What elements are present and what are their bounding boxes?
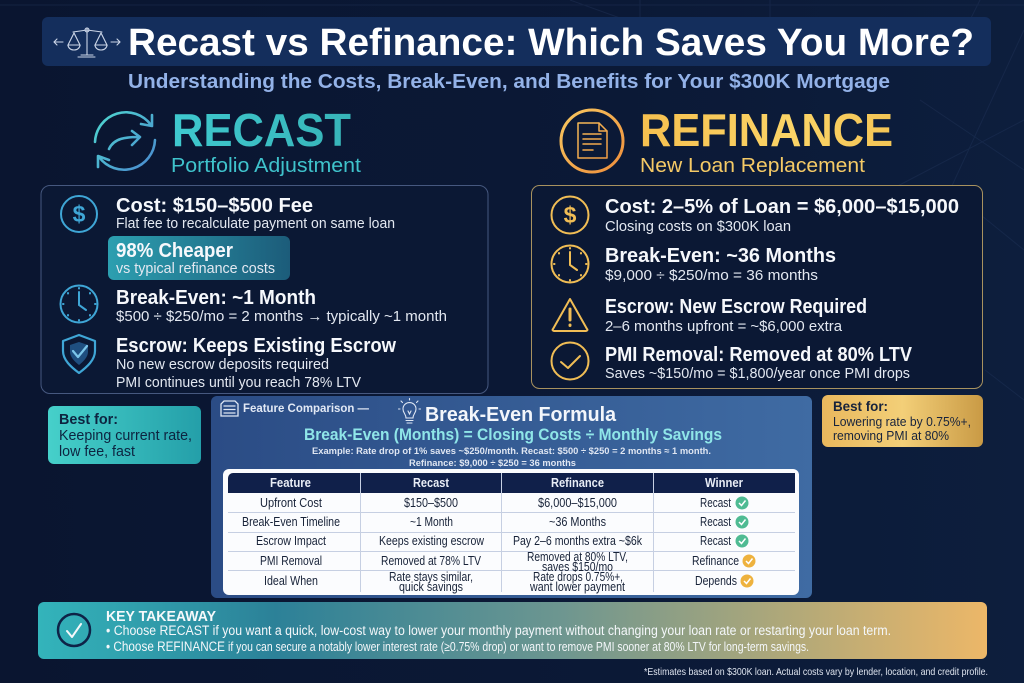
recast escrow: PMI continues until you reach 78% LTV <box>116 375 361 391</box>
icon: light bulb <box>398 398 420 423</box>
takeaway refinance line: • Choose REFINANCE <box>106 639 225 654</box>
formula heading: Break-Even Formula <box>425 404 617 426</box>
row: PMI removal: Removed at 80% LTV, <box>527 550 628 564</box>
callout: refinance best for: removing PMI at 80% <box>833 428 949 443</box>
icon: takeaway check <box>58 614 90 646</box>
icon: balance scales <box>54 28 120 57</box>
row: ideal when: quick savings <box>399 580 463 594</box>
refinance break-even: $9,000 ÷ $250/mo = 36 months <box>605 268 818 284</box>
row: break-even timeline: Break-Even Timeline <box>242 515 340 529</box>
recast cost: Cost: $150–$500 Fee <box>116 195 313 217</box>
recast break-even: Break-Even: ~1 Month <box>116 287 316 309</box>
callout: recast best for: Keeping current rate, <box>59 427 192 444</box>
row: ideal when <box>264 570 754 594</box>
recast header <box>95 104 361 177</box>
takeaway heading: KEY TAKEAWAY <box>106 608 216 625</box>
row: break-even timeline <box>242 515 748 529</box>
refinance cost: Cost: 2–5% of Loan = $6,000–$15,000 <box>605 196 959 218</box>
row: PMI removal: PMI Removal <box>260 554 322 568</box>
title banner <box>42 17 991 66</box>
icon: refinance clock <box>552 246 588 282</box>
row: escrow impact: Keeps existing escrow <box>379 534 485 548</box>
formula example <box>312 446 711 469</box>
icon: recast clock <box>60 286 98 322</box>
subtitle: Understanding the Costs, Break-Even, and Benefits for Your $300K Mortgage <box>128 71 890 93</box>
icon: document list <box>221 401 238 416</box>
icon: recast dollar: $ <box>73 201 86 227</box>
icon: recast arrows <box>95 112 155 170</box>
refinance break-even: Break-Even: ~36 Months <box>605 245 836 267</box>
callout: 98% cheaper <box>108 236 290 280</box>
icon: refinance check <box>552 342 588 380</box>
recast heading: RECAST <box>172 104 351 156</box>
table header: Winner <box>705 476 743 490</box>
recast escrow: No new escrow deposits required <box>116 357 329 373</box>
feature comparison label: Feature Comparison — <box>243 401 369 415</box>
callout: recast best for <box>48 406 201 464</box>
comparison table <box>223 469 799 595</box>
row: ideal when: Ideal When <box>264 574 318 588</box>
callout: 98% cheaper: vs typical refinance costs <box>116 261 275 277</box>
panel: refinance details <box>532 186 982 388</box>
row: PMI removal: Refinance <box>692 554 739 568</box>
row: PMI removal <box>260 550 756 574</box>
refinance escrow: Escrow: New Escrow Required <box>605 296 867 318</box>
refinance PMI <box>605 344 913 382</box>
recast subheading: Portfolio Adjustment <box>171 155 361 177</box>
icon: refinance dollar <box>552 196 588 234</box>
row: escrow impact <box>256 534 748 548</box>
row: PMI removal: saves $150/mo <box>542 560 613 574</box>
panel: feature comparison and formula <box>211 396 812 598</box>
icon: shield <box>63 335 95 373</box>
callout: refinance best for: Best for: <box>833 399 888 414</box>
row: ideal when: Rate drops 0.75%+, <box>533 570 623 584</box>
recast break-even: $500 ÷ $250/mo = 2 months → typically ~1 month <box>116 308 447 325</box>
refinance cost <box>605 196 959 235</box>
refinance escrow: 2–6 months upfront = ~$6,000 extra <box>605 319 843 335</box>
takeaway refinance line <box>106 639 809 654</box>
table header <box>270 476 743 490</box>
recast cost <box>116 195 395 232</box>
icon: refinance document <box>561 110 623 172</box>
refinance escrow <box>605 296 867 335</box>
callout: 98% cheaper: 98% Cheaper <box>116 240 233 262</box>
recast break-even <box>116 287 447 325</box>
refinance cost: Closing costs on $300K loan <box>605 219 791 235</box>
refinance PMI: Saves ~$150/mo = $1,800/year once PMI drops <box>605 366 910 382</box>
formula example: Refinance: $9,000 ÷ $250 = 36 months <box>409 458 576 469</box>
row: break-even timeline: ~1 Month <box>410 515 453 529</box>
table header: Refinance <box>551 476 604 490</box>
refinance header <box>561 104 893 177</box>
recast cost: Flat fee to recalculate payment on same loan <box>116 216 395 232</box>
row: escrow impact: Recast <box>700 534 731 548</box>
callout: recast best for: Best for: <box>59 412 118 428</box>
icon: refinance dollar: $ <box>564 202 577 228</box>
icon: warning triangle <box>553 299 587 331</box>
callout: refinance best for <box>822 395 983 447</box>
refinance PMI: PMI Removal: Removed at 80% LTV <box>605 344 913 366</box>
row: ideal when: Depends <box>695 574 737 588</box>
panel: key takeaway <box>38 602 987 659</box>
refinance break-even <box>605 245 836 284</box>
row: upfront cost: Upfront Cost <box>260 496 322 510</box>
formula: Break-Even (Months) = Closing Costs ÷ Monthly Savings <box>304 425 722 444</box>
row: escrow impact: Escrow Impact <box>256 534 326 548</box>
row: upfront cost: $150–$500 <box>404 496 458 510</box>
callout: refinance best for: Lowering rate by 0.75%+, <box>833 414 971 429</box>
table header: Feature <box>270 476 311 490</box>
recast escrow <box>116 335 396 391</box>
row: break-even timeline: ~36 Months <box>549 515 606 529</box>
takeaway recast line: • Choose RECAST if you want a quick, low-cost way to lower your monthly payment without changing your loan rate or restarting your loan term. <box>106 623 891 638</box>
takeaway refinance line: if you can secure a notably lower interest rate (≥0.75% drop) or want to remove PMI sooner at 80% LTV for long-term savings. <box>228 639 809 654</box>
formula example: Example: Rate drop of 1% saves ~$250/month. Recast: $500 ÷ $250 = 2 months ≈ 1 month. <box>312 446 711 457</box>
icon: recast dollar <box>61 196 97 232</box>
row: upfront cost <box>260 496 748 510</box>
row: upfront cost: $6,000–$15,000 <box>538 496 617 510</box>
row: break-even timeline: Recast <box>700 515 731 529</box>
panel: recast details <box>41 186 488 394</box>
refinance subheading: New Loan Replacement <box>640 155 865 177</box>
row: PMI removal: Removed at 78% LTV <box>381 554 482 568</box>
row: upfront cost: Recast <box>700 496 731 510</box>
table header: Recast <box>413 476 450 490</box>
row: ideal when: want lower payment <box>529 580 625 594</box>
recast escrow: Escrow: Keeps Existing Escrow <box>116 335 396 357</box>
row: escrow impact: Pay 2–6 months extra ~$6k <box>513 534 643 548</box>
callout: recast best for: low fee, fast <box>59 443 136 460</box>
title: Recast vs Refinance: Which Saves You More? <box>128 22 974 64</box>
refinance heading: REFINANCE <box>640 104 893 156</box>
row: ideal when: Rate stays similar, <box>389 570 473 584</box>
